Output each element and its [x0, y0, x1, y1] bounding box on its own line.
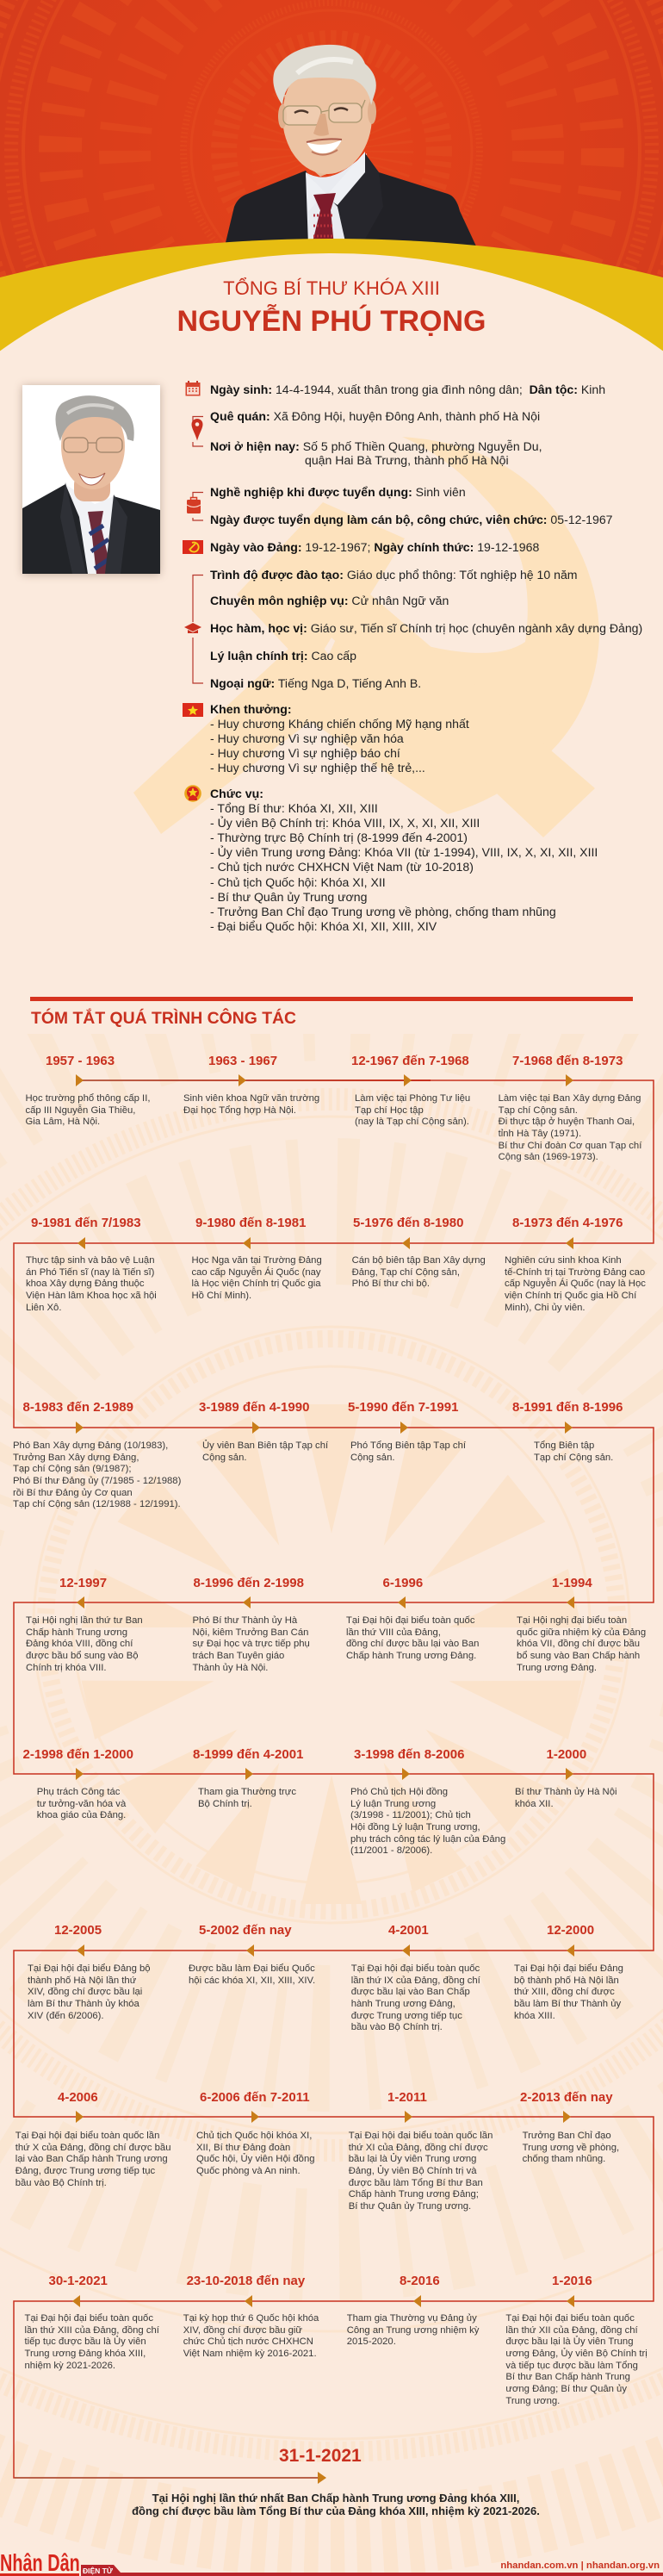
entry: 1957 - 1963: 1957 - 1963	[46, 1054, 115, 1068]
timeline: Bí thư Quân ủy Trung ương.	[349, 2201, 471, 2212]
entry: 8-1983 đến 2-1989: rồi Bí thư Đảng ủy Cơ quan	[13, 1488, 133, 1498]
final entry: 31-1-2021	[129, 2445, 542, 2518]
entry: 8-1983 đến 2-1989: 8-1983 đến 2-1989	[22, 1400, 133, 1415]
entry: 8-1996 đến 2-1998: Thành ủy Hà Nội.	[193, 1663, 268, 1673]
entry: 3-1998 đến 8-2006: 3-1998 đến 8-2006	[354, 1747, 464, 1762]
timeline	[13, 1054, 648, 2517]
entry: 9-1980 đến 8-1981	[191, 1216, 322, 1301]
header background: red bronze drum pattern and arches	[0, 0, 663, 277]
watermark: hammer and sickle	[133, 437, 599, 837]
entry: 1-2011: được bầu làm Tổng Bí thư Ban	[349, 2178, 483, 2188]
entry: 9-1980 đến 8-1981: là Học viện Chính trị Quốc gia	[191, 1279, 321, 1289]
entry: 8-1983 đến 2-1989: Tạp chí Cộng sản (9/1987);	[13, 1464, 132, 1474]
entry: 30-1-2021: Trung ương Đảng khóa XIII,	[24, 2349, 146, 2359]
icon: graduation cap with bracket line	[184, 574, 203, 684]
entry: 5-2002 đến nay: Được bầu làm Đại biểu Quốc	[189, 1963, 315, 1974]
entry: 8-1983 đến 2-1989: Phó Bí thư Đảng ủy (7/1985 - 12/1988)	[13, 1476, 181, 1486]
entry: 8-1999 đến 4-2001: Tham gia Thường trực	[198, 1787, 296, 1797]
entry: 5-2002 đến nay: 5-2002 đến nay	[199, 1923, 292, 1938]
entry: 8-1983 đến 2-1989	[0, 1400, 185, 1512]
text: residence	[210, 439, 542, 467]
entry: 1-2016: và tiếp tục được bầu làm Tổng	[505, 2361, 638, 2371]
timeline: Cộng sản (1969-1973).	[499, 1152, 598, 1162]
entry: 1-2011: bầu lại là Ủy viên Trung ương	[349, 2154, 476, 2164]
entry: 4-2001: được Trung ương tiếp tục	[351, 2011, 462, 2021]
entry: 9-1980 đến 8-1981: Hồ Chí Minh).	[191, 1291, 251, 1301]
entry: 6-2006 đến 7-2011: 6-2006 đến 7-2011	[200, 2090, 310, 2105]
entry: 6-1996: 6-1996	[382, 1576, 423, 1590]
entry: 1-2016: Trung ương.	[505, 2396, 560, 2406]
entry: 30-1-2021: nhiệm kỳ 2021-2026.	[24, 2361, 115, 2371]
entry: 12-2000: bộ thành phố Hà Nội lần	[514, 1976, 619, 1986]
entry: 12-1997: Chấp hành Trung ương	[26, 1627, 127, 1638]
text: positions: - Tổng Bí thư: Khóa XI, XII, XIII	[210, 801, 378, 815]
icon: location pin with brackets	[191, 415, 203, 447]
entry: 3-1989 đến 4-1990: Cộng sản.	[202, 1453, 246, 1463]
entry: 2-1998 đến 1-2000: Phụ trách Công tác	[37, 1787, 120, 1797]
entry: 6-1996: Chấp hành Trung ương Đảng.	[346, 1651, 476, 1661]
icon: national emblem	[184, 785, 201, 802]
entry: 30-1-2021: Tại Đại hội đại biểu toàn quốc	[24, 2313, 153, 2324]
entry: 1963 - 1967: Sinh viên khoa Ngữ văn trường	[183, 1093, 319, 1104]
entry: 30-1-2021: 30-1-2021	[48, 2274, 108, 2288]
entry: 23-10-2018 đến nay: Tại kỳ họp thứ 6 Quốc hội khóa	[183, 2313, 319, 2324]
arrows row 1	[76, 1074, 573, 1086]
entry: 9-1981 đến 7/1983: 9-1981 đến 7/1983	[31, 1216, 141, 1230]
entry: 12-2005: làm Bí thư Thành ủy khóa	[28, 1999, 139, 2009]
entry: 8-1996 đến 2-1998: sự Đại học và trực tiếp phụ	[193, 1639, 310, 1649]
website addresses: nhandan.com.vn | nhandan.org.vn	[500, 2560, 660, 2571]
text: political theory: Lý luận chính trị: Cao cấp	[210, 649, 356, 663]
entry: 5-1990 đến 7-1991: Cộng sản.	[350, 1453, 394, 1463]
entry: 4-2006: bầu vào Bộ Chính trị.	[15, 2178, 107, 2188]
entry: 2-1998 đến 1-2000: khoa giáo của Đảng.	[37, 1810, 126, 1820]
entry: 1-2016: Bí thư Ban Chấp hành Trung	[505, 2372, 630, 2382]
entry: 2-2013 đến nay: 2-2013 đến nay	[520, 2090, 613, 2105]
portrait: smiling man in dark suit	[226, 45, 476, 246]
entry: 5-1990 đến 7-1991	[340, 1400, 486, 1495]
entry: 5-2002 đến nay: hội các khóa XI, XII, XIII, XIV.	[189, 1976, 315, 1986]
text: awards: - Huy chương Vì sự nghiệp báo chí	[210, 746, 400, 760]
entry: 12-2005: 12-2005	[54, 1923, 102, 1938]
entry: 1-2011	[340, 2090, 495, 2185]
entry: 8-1983 đến 2-1989: Tạp chí Cộng sản (12/1988 - 12/1991).	[13, 1499, 181, 1509]
entry: 2-1998 đến 1-2000	[0, 1747, 172, 1842]
entry: 4-2001: được bầu lại vào Ban Chấp	[351, 1987, 470, 1997]
text: positions: - Chủ tịch Quốc hội: Khóa XI, XII	[210, 875, 386, 889]
entry: 4-2006: lại vào Ban Chấp hành Trung ương	[15, 2154, 168, 2164]
arrows row 4	[77, 1596, 574, 1608]
entry: 8-1983 đến 2-1989: Trưởng Ban Xây dựng Đảng,	[13, 1453, 139, 1463]
entry: 3-1989 đến 4-1990: 3-1989 đến 4-1990	[199, 1400, 309, 1415]
entry: 23-10-2018 đến nay: Việt Nam nhiệm kỳ 2016-2021.	[183, 2349, 317, 2359]
entry: 6-1996: đồng chí được bầu lại vào Ban	[346, 1639, 479, 1649]
entry: 4-2001: lần thứ IX của Đảng, đồng chí	[351, 1976, 480, 1986]
entry: 5-1976 đến 8-1980: Đảng, Tạp chí Cộng sản,	[352, 1267, 460, 1278]
entry: 5-1990 đến 7-1991: 5-1990 đến 7-1991	[348, 1400, 458, 1415]
footer red bar and tab	[0, 2550, 663, 2576]
entry: 8-2016: Công an Trung ương nhiệm kỳ	[347, 2325, 479, 2336]
entry: 8-1973 đến 4-1976	[505, 1216, 646, 1313]
text: positions: Chức vụ:	[210, 787, 263, 800]
icon: briefcase with brackets	[187, 491, 203, 521]
entry: 3-1998 đến 8-2006: Phó Chủ tịch Hội đồng	[350, 1787, 448, 1797]
entry: 5-1976 đến 8-1980: Phó Bí thư chi bộ.	[352, 1279, 430, 1289]
entry: 12-2000	[495, 1923, 650, 2018]
panel: profile	[17, 381, 642, 933]
entry: 4-2006: Tại Đại hội đại biểu toàn quốc lần	[15, 2131, 159, 2141]
arrows row 5	[76, 1768, 573, 1780]
entry: 30-1-2021: tiếp tục được bầu là Ủy viên	[24, 2336, 146, 2347]
section heading with red rule	[30, 997, 633, 1028]
entry: 1-2016: ương Đảng; Bí thư Quân ủy	[505, 2384, 627, 2394]
entry: 2-1998 đến 1-2000: tư tưởng-văn hóa và	[37, 1799, 126, 1809]
text: specialty: Chuyên môn nghiệp vụ: Cử nhân Ngữ văn	[210, 594, 449, 607]
entry: 12-1997: 12-1997	[59, 1576, 107, 1590]
timeline: (11/2001 - 8/2006).	[350, 1845, 432, 1856]
entry: 1-1994	[495, 1576, 650, 1671]
entry: 23-10-2018 đến nay: chức Chủ tịch nước CHXHCN	[183, 2336, 313, 2347]
entry: 12-1967 đến 7-1968: Làm việc tại Phòng Tư liệu	[355, 1093, 470, 1104]
text: party dates: Ngày vào Đảng: 19-12-1967; Ngày chính thức: 19-12-1968	[210, 540, 539, 554]
entry: 9-1981 đến 7/1983	[26, 1216, 157, 1313]
entry: 1963 - 1967	[183, 1054, 319, 1116]
entry: 8-1999 đến 4-2001: Bộ Chính trị.	[198, 1799, 252, 1809]
timeline: Chấp hành Trung ương Đảng;	[349, 2189, 479, 2200]
entry: 4-2001: Tại Đại hội đại biểu toàn quốc	[351, 1963, 480, 1974]
entry: 1-2016: ương Đảng, Ủy viên Bộ Chính trị	[505, 2349, 648, 2359]
entry: 8-2016: Tham gia Thường vụ Đảng ủy	[347, 2313, 477, 2324]
entry: 6-2006 đến 7-2011: Quốc hội, Ủy viên Hội đồng	[196, 2154, 315, 2164]
logo tag: điện tử: ĐIỆN TỬ	[83, 2567, 113, 2575]
entry: 1-1994: 1-1994	[552, 1576, 592, 1590]
footer	[0, 2550, 663, 2576]
entry: 1-1994: Tại Hội nghị đại biểu toàn	[517, 1615, 627, 1626]
entry: 6-2006 đến 7-2011	[177, 2090, 340, 2185]
arrows row 3	[76, 1422, 573, 1434]
entry: 9-1981 đến 7/1983: Viện Hàn lâm Khoa học xã hội	[26, 1291, 157, 1301]
arrows row 8	[72, 2295, 574, 2307]
text: residence: quận Hai Bà Trưng, thành phố Hà Nội	[305, 453, 509, 467]
final description: Tại Hội nghị lần thứ nhất Ban Chấp hành Trung ương Đảng khóa XIII,	[152, 2492, 519, 2504]
entry: 5-1976 đến 8-1980	[351, 1216, 486, 1289]
entry: 4-2006: thứ X của Đảng, đồng chí được bầu	[15, 2143, 170, 2153]
entry: 3-1989 đến 4-1990	[189, 1400, 340, 1495]
arrows row 7	[76, 2111, 571, 2123]
text: hometown: Quê quán: Xã Đông Hội, huyện Đông Anh, thành phố Hà Nội	[210, 409, 540, 423]
entry: 12-2000: thứ XIII, đồng chí được	[514, 1987, 615, 1997]
entry: 8-1973 đến 4-1976: Minh), Chi ủy viên.	[505, 1303, 586, 1313]
entry: 9-1980 đến 8-1981: 9-1980 đến 8-1981	[195, 1216, 306, 1230]
entry: 5-1976 đến 8-1980: Cán bộ biên tập Ban Xây dựng	[352, 1255, 486, 1266]
entry: 6-1996: Tại Đại hội đại biểu toàn quốc	[346, 1615, 474, 1626]
entry: 8-1973 đến 4-1976: 8-1973 đến 4-1976	[512, 1216, 623, 1230]
entry: 5-1990 đến 7-1991: Phó Tổng Biên tập Tạp chí	[350, 1440, 466, 1451]
entry: 6-1996	[340, 1576, 486, 1671]
text: languages: Ngoại ngữ: Tiếng Nga D, Tiếng Anh B.	[210, 676, 421, 690]
entry: 7-1968 đến 8-1973: tỉnh Hà Tây (1971).	[499, 1129, 581, 1139]
entry: 12-2000: khóa XIII.	[514, 2011, 555, 2021]
entry: 1-2016: 1-2016	[552, 2274, 592, 2288]
entry: 1-1994: khóa VII, đồng chí được bầu	[517, 1639, 640, 1649]
text: positions: - Ủy viên Bộ Chính trị: Khóa VIII, IX, X, XI, XII, XIII	[210, 816, 480, 830]
text: positions: - Đại biểu Quốc hội: Khóa XI, XII, XIII, XIV	[210, 919, 437, 933]
entry: 12-1997: Đảng khóa VIII, đồng chí	[26, 1639, 133, 1649]
entry: 1963 - 1967: 1963 - 1967	[208, 1054, 277, 1068]
text: awards: - Huy chương Kháng chiến chống Mỹ hạng nhất	[210, 717, 469, 731]
entry: 1957 - 1963	[26, 1054, 150, 1127]
yellow and cream arch	[0, 239, 663, 362]
entry: 1-2016: được bầu lại là Ủy viên Trung	[505, 2336, 634, 2347]
entry: 12-1967 đến 7-1968	[351, 1054, 470, 1127]
entry: 8-2016: 8-2016	[400, 2274, 440, 2288]
text: residence: Nơi ở hiện nay: Số 5 phố Thiền Quang, phường Nguyễn Du,	[210, 439, 542, 453]
entry: 1-2016: lần thứ XII của Đảng, đồng chí	[505, 2325, 638, 2336]
entry: 7-1968 đến 8-1973: Làm việc tại Ban Xây dựng Đảng	[499, 1093, 641, 1104]
entry: 12-2005: Tại Đại hội đại biểu Đảng bộ	[28, 1963, 151, 1974]
entry: 7-1968 đến 8-1973: Bí thư Chi đoàn Cơ quan Tạp chí	[499, 1141, 641, 1151]
entry: 1-2011: Tại Đại hội đại biểu toàn quốc lần	[349, 2131, 493, 2141]
entry: 9-1981 đến 7/1983: Thực tập sinh và bảo vệ Luận	[26, 1255, 155, 1266]
entry: 12-2005: thành phố Hà Nội lần thứ	[28, 1976, 136, 1986]
entry: 12-1967 đến 7-1968: (nay là Tạp chí Cộng sản).	[355, 1117, 469, 1127]
entry: 4-2006: 4-2006	[58, 2090, 98, 2105]
logo: Nhân Dân: Nhân Dân	[0, 2549, 80, 2576]
entry: 1-2016	[495, 2274, 650, 2411]
icon: national flag	[183, 703, 203, 717]
entry: 8-1973 đến 4-1976: tế-Chính trị tại Trường Đảng cao	[505, 1267, 645, 1278]
entry: 8-1996 đến 2-1998: 8-1996 đến 2-1998	[193, 1576, 304, 1590]
final date: 31-1-2021	[279, 2446, 362, 2466]
entry: 12-1997: Chính trị khóa VIII.	[26, 1663, 107, 1673]
entry: 9-1980 đến 8-1981: Học Nga văn tại Trường Đảng	[191, 1255, 322, 1266]
entry: 8-1991 đến 8-1996: 8-1991 đến 8-1996	[512, 1400, 623, 1415]
entry: 3-1998 đến 8-2006: Hội đồng Lý luận Trung ương,	[350, 1822, 480, 1832]
entry: 9-1980 đến 8-1981: cao cấp Nguyễn Ái Quốc (nay	[191, 1267, 321, 1278]
final description: đồng chí được bầu làm Tổng Bí thư của Đảng khóa XIII, nhiệm kỳ 2021-2026.	[132, 2504, 540, 2517]
entry: 2-1998 đến 1-2000: 2-1998 đến 1-2000	[22, 1747, 133, 1762]
entry: 2-2013 đến nay: Trung ương về phòng,	[523, 2143, 619, 2153]
entry: 2-2013 đến nay	[495, 2090, 650, 2185]
title line 1: TỔNG BÍ THƯ KHÓA XIII	[223, 277, 440, 299]
entry: 12-1997: Tại Hội nghị lần thứ tư Ban	[26, 1615, 143, 1626]
entry: 3-1989 đến 4-1990: Ủy viên Ban Biên tập Tạp chí	[202, 1440, 328, 1451]
text: date of birth: Ngày sinh: 14-4-1944, xuất thân trong gia đình nông dân; Dân tộc: Kinh	[210, 383, 605, 396]
heading text: TÓM TẮT QUÁ TRÌNH CÔNG TÁC	[31, 1009, 296, 1028]
text: awards: - Huy chương Vì sự nghiệp thế hệ trẻ,...	[210, 761, 425, 775]
entry: 23-10-2018 đến nay: XIV, đồng chí được bầu giữ	[183, 2325, 302, 2336]
title	[177, 277, 486, 338]
text: positions: - Thường trực Bộ Chính trị (8-1999 đến 4-2001)	[210, 831, 468, 844]
entry: 1957 - 1963: Học trường phổ thông cấp II,	[26, 1093, 150, 1104]
entry: 1957 - 1963: cấp III Nguyễn Gia Thiều,	[26, 1105, 135, 1116]
entry: 1-1994: Trung ương Đảng.	[517, 1663, 597, 1673]
entry: 1-1994: bổ sung vào Ban Chấp hành	[517, 1651, 640, 1661]
entry: 8-1996 đến 2-1998: Phó Bí thư Thành ủy Hà	[193, 1615, 297, 1626]
entry: 8-1973 đến 4-1976: viện Chính trị Quốc gia Hồ Chí	[505, 1291, 636, 1301]
entry: 4-2006	[0, 2090, 177, 2185]
entry: 8-1973 đến 4-1976: cấp Nguyễn Ái Quốc (nay là Học	[505, 1279, 646, 1289]
entry: 12-2000: 12-2000	[547, 1923, 594, 1938]
final description	[129, 2492, 542, 2518]
entry: 8-1973 đến 4-1976: Nghiên cứu sinh khoa Kinh	[505, 1255, 622, 1266]
entry: 5-1976 đến 8-1980: 5-1976 đến 8-1980	[353, 1216, 463, 1230]
entry: 8-1991 đến 8-1996: Tạp chí Cộng sản.	[534, 1453, 613, 1463]
text: recruitment date: Ngày được tuyển dụng làm cán bộ, công chức, viên chức: 05-12-1967	[210, 513, 613, 526]
entry: 8-1996 đến 2-1998: trách Ban Tuyên giáo	[193, 1651, 284, 1661]
text: occupation: Nghề nghiệp khi được tuyển dụng: Sinh viên	[210, 485, 466, 499]
entry: 1-2000: Bí thư Thành ủy Hà Nội	[515, 1787, 617, 1797]
text: awards: Khen thưởng:	[210, 702, 292, 716]
entry: 1-2011: Đảng, Ủy viên Bộ Chính trị và	[349, 2166, 477, 2176]
entry: 9-1981 đến 7/1983: án Phó Tiến sĩ (nay là Tiến sĩ)	[26, 1267, 154, 1278]
entry: 9-1981 đến 7/1983: khoa Xây dựng Đảng thuộc	[26, 1279, 145, 1289]
entry: 4-2006: Đảng, được Trung ương tiếp tục	[15, 2166, 155, 2176]
entry: 7-1968 đến 8-1973	[498, 1054, 642, 1162]
entry: 1-2000: khóa XII.	[515, 1799, 554, 1809]
entry: 9-1981 đến 7/1983: Liên Xô.	[26, 1303, 61, 1313]
entry: 7-1968 đến 8-1973: Đi thực tập ở huyện Thanh Oai,	[499, 1117, 635, 1127]
entry: 6-2006 đến 7-2011: Chủ tịch Quốc hội khóa XI,	[196, 2131, 312, 2141]
entry: 23-10-2018 đến nay	[172, 2274, 340, 2368]
entry: 8-1999 đến 4-2001: 8-1999 đến 4-2001	[193, 1747, 303, 1762]
entry: 12-2000: Tại Đại hội đại biểu Đảng	[514, 1963, 623, 1974]
entry: 8-1999 đến 4-2001	[172, 1747, 340, 1842]
entry: 8-1996 đến 2-1998	[172, 1576, 340, 1671]
timeline connector and arrows	[13, 1074, 654, 2484]
text: positions: - Chủ tịch nước CHXHCN Việt Nam (từ 10-2018)	[210, 860, 474, 874]
entry: 8-2016	[340, 2274, 486, 2368]
entry: 8-1991 đến 8-1996	[495, 1400, 650, 1495]
entry: 1-2011: thứ XI của Đảng, đồng chí được	[349, 2143, 488, 2153]
timeline: bầu vào Bộ Chính trị.	[351, 2022, 443, 2032]
entry: 1963 - 1967: Đại học Tổng hợp Hà Nội.	[183, 1105, 296, 1116]
entry: 6-2006 đến 7-2011: XII, Bí thư Đảng đoàn	[196, 2143, 290, 2153]
entry: 8-1983 đến 2-1989: Phó Ban Xây dựng Đảng (10/1983),	[13, 1440, 168, 1451]
final arrow	[318, 2472, 326, 2484]
entry: 4-2001	[340, 1923, 486, 2018]
entry: 7-1968 đến 8-1973: Tạp chí Cộng sản.	[499, 1105, 578, 1116]
icon: Party flag	[183, 540, 203, 554]
entry: 1-2011: 1-2011	[387, 2090, 427, 2105]
entry: 8-2016: 2015-2020.	[347, 2336, 396, 2347]
arrows row 6	[77, 1944, 574, 1957]
entry: 8-1996 đến 2-1998: Nội, kiêm Trưởng Ban Cán	[193, 1627, 308, 1638]
entry: 8-1991 đến 8-1996: Tổng Biên tập	[534, 1440, 594, 1451]
entry: 3-1998 đến 8-2006	[340, 1747, 508, 1842]
text: awards: - Huy chương Vì sự nghiệp văn hóa	[210, 731, 404, 745]
entry: 12-1967 đến 7-1968: Tạp chí Học tập	[355, 1105, 424, 1116]
entry: 12-2005: XIV (đến 6/2006).	[28, 2011, 104, 2021]
text: positions	[210, 787, 598, 933]
icon: calendar	[186, 381, 200, 396]
entry: 1-2016: Tại Đại hội đại biểu toàn quốc	[505, 2313, 635, 2324]
background pattern: bronze drum behind timeline	[0, 1034, 663, 2573]
header panel	[0, 0, 663, 352]
entry: 30-1-2021: lần thứ XIII của Đảng, đồng chí	[24, 2325, 159, 2336]
text: degree: Học hàm, học vị: Giáo sư, Tiến sĩ Chính trị học (chuyên ngành xây dựng Đảng)	[210, 621, 642, 635]
entry: 5-2002 đến nay	[172, 1923, 340, 2018]
entry: 1957 - 1963: Gia Lâm, Hà Nội.	[26, 1117, 100, 1127]
entry: 12-1997	[0, 1576, 172, 1671]
entry: 4-2001: hành Trung ương Đảng,	[351, 1999, 455, 2009]
title line 2: name: NGUYỄN PHÚ TRỌNG	[177, 305, 486, 338]
text: awards	[210, 702, 469, 775]
red rule	[30, 997, 633, 1001]
entry: 3-1998 đến 8-2006: Lý luận Trung ương	[350, 1799, 436, 1809]
entry: 4-2001: 4-2001	[388, 1923, 429, 1938]
entry: 3-1998 đến 8-2006: (3/1998 - 11/2001); Chủ tịch	[350, 1810, 471, 1820]
entry: 6-2006 đến 7-2011: Quốc phòng và An ninh.	[196, 2166, 301, 2176]
entry: 12-2000: bầu làm Bí thư Thành ủy	[514, 1999, 621, 2009]
entry: 3-1998 đến 8-2006: phụ trách công tác lý luận của Đảng	[350, 1834, 505, 1845]
entry: 2-2013 đến nay: Trưởng Ban Chỉ đạo	[523, 2131, 611, 2141]
text: positions: - Trưởng Ban Chỉ đạo Trung ương về phòng, chống tham nhũng	[210, 905, 556, 918]
entry: 23-10-2018 đến nay: 23-10-2018 đến nay	[187, 2274, 305, 2288]
entry: 30-1-2021	[0, 2274, 172, 2368]
text: positions: - Bí thư Quân ủy Trung ương	[210, 890, 367, 904]
portrait photo	[17, 381, 165, 579]
entry: 12-1997: được bầu bổ sung vào Bộ	[26, 1651, 139, 1661]
entry: 12-1967 đến 7-1968: 12-1967 đến 7-1968	[351, 1054, 469, 1068]
text: positions: - Ủy viên Trung ương Đảng: Khóa VII (từ 1-1994), VIII, IX, X, XI, XII, XIII	[210, 845, 598, 859]
entry: 6-1996: lần thứ VIII của Đảng,	[346, 1627, 441, 1638]
entry: 12-2005: XIV, đồng chí được bầu lại	[28, 1987, 142, 1997]
arrows row 2	[77, 1237, 573, 1249]
entry: 1-2000	[512, 1747, 650, 1842]
entry: 1-2000: 1-2000	[546, 1747, 586, 1762]
text: education: Trình độ được đào tạo: Giáo dục phổ thông: Tốt nghiệp hệ 10 năm	[210, 568, 578, 582]
entry: 1-1994: quốc giữa nhiệm kỳ của Đảng	[517, 1627, 646, 1638]
entry: 12-2005	[0, 1923, 172, 2018]
entry: 2-2013 đến nay: chống tham nhũng.	[523, 2154, 605, 2164]
entry: 7-1968 đến 8-1973: 7-1968 đến 8-1973	[512, 1054, 623, 1068]
